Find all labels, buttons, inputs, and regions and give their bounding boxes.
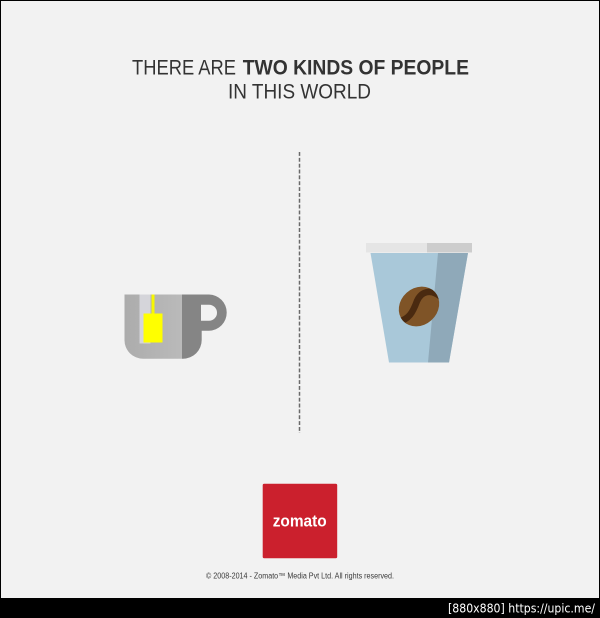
logo: zomato: zomato [273, 512, 327, 530]
title: IN THIS WORLD [228, 80, 371, 104]
tea bag string [152, 294, 154, 314]
title: THERE ARE [132, 56, 236, 80]
lid [366, 243, 427, 252]
lid shaded side [427, 243, 472, 252]
logo: zomato [263, 484, 337, 558]
icon: coffee cup [366, 243, 472, 362]
cup body [370, 253, 468, 362]
tea bag [144, 314, 162, 342]
cup shaded side [428, 253, 468, 362]
cup handle and dark side [182, 294, 227, 359]
icon: tea cup [124, 294, 227, 359]
title [132, 56, 469, 104]
inner highlight stripe [140, 294, 150, 344]
copyright: © 2008-2014 - Zomato™ Media Pvt Ltd. All rights reserved. [206, 572, 394, 580]
dashed divider [298, 152, 300, 433]
title: TWO KINDS OF PEOPLE [243, 56, 469, 80]
coffee bean [398, 286, 440, 326]
cup body light side [124, 294, 182, 359]
